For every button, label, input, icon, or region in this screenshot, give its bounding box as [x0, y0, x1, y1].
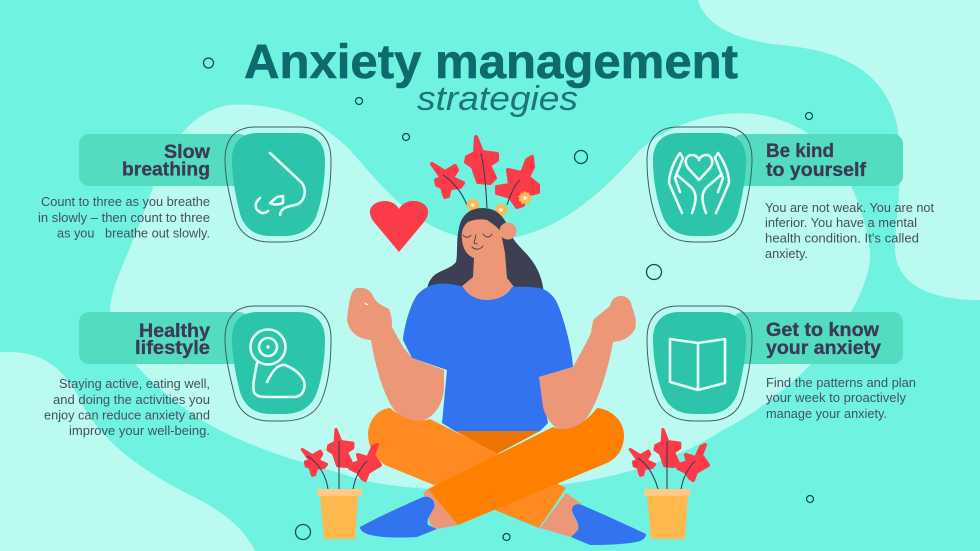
- over leg: [428, 408, 624, 525]
- description: Find the patterns and plan: [766, 376, 916, 390]
- description: enjoy can reduce anxiety and: [44, 408, 210, 422]
- label bar: [79, 134, 249, 186]
- panel: slow breathing: [38, 127, 331, 242]
- icon badge: muscle arm: [225, 306, 331, 421]
- left foot ankle: [423, 489, 458, 529]
- description: [38, 195, 210, 240]
- heading: lifestyle: [135, 338, 210, 359]
- description: You are not weak. You are not: [765, 201, 935, 215]
- heading: [766, 141, 867, 181]
- description: as you breathe out slowly.: [57, 226, 210, 240]
- description: [44, 377, 210, 438]
- description: Count to three as you breathe: [41, 195, 210, 209]
- illustration: meditating woman: [347, 137, 646, 545]
- heading: Be kind: [766, 141, 834, 162]
- right foot: [571, 504, 646, 545]
- description: health condition. It's called: [765, 232, 919, 246]
- icon: heart: [370, 201, 428, 252]
- heading: Get to know: [766, 320, 879, 341]
- crotch shadow: [455, 431, 540, 454]
- description: [766, 376, 916, 421]
- icon badge: nose: [225, 127, 331, 242]
- heading: [122, 142, 210, 180]
- label bar: [733, 312, 903, 364]
- description: in slowly – then count to three: [38, 211, 210, 225]
- description: inferior. You have a mental: [765, 216, 917, 230]
- description: Staying active, eating well,: [59, 377, 210, 391]
- decorative small circles: [204, 58, 814, 540]
- panel: healthy lifestyle: [44, 306, 331, 438]
- plant: left pot: [302, 430, 380, 539]
- icon badge: open book: [647, 306, 752, 421]
- right foot ankle: [540, 493, 582, 537]
- hair: [427, 208, 544, 295]
- panel: be kind to yourself: [647, 127, 935, 261]
- title: strategies: [417, 80, 578, 118]
- heading: [766, 320, 881, 359]
- description: manage your anxiety.: [766, 407, 887, 421]
- flowers on head: [432, 137, 538, 216]
- description: and doing the activities you: [53, 393, 210, 407]
- left foot: [360, 497, 437, 538]
- facial features: [463, 234, 492, 249]
- label bar: [79, 312, 249, 364]
- title: [244, 36, 738, 118]
- plant: right pot: [630, 430, 708, 539]
- description: improve your well-being.: [69, 424, 210, 438]
- face and neck: [461, 219, 514, 302]
- label bar: [733, 134, 903, 186]
- heading: Slow: [164, 142, 210, 163]
- right arm and hand: [539, 296, 636, 430]
- panel: get to know your anxiety: [647, 306, 916, 421]
- ear: [500, 222, 516, 240]
- description: your week to proactively: [766, 391, 907, 405]
- description: [765, 201, 935, 261]
- left arm and hand: [347, 288, 444, 422]
- under leg: [368, 408, 566, 528]
- icon badge: hands holding heart: [647, 127, 752, 242]
- heading: Healthy: [139, 321, 210, 342]
- hand highlight: [364, 302, 618, 312]
- heading: your anxiety: [766, 338, 881, 359]
- heading: breathing: [122, 160, 210, 180]
- title: Anxiety management: [244, 36, 738, 89]
- shirt: [403, 284, 573, 431]
- heading: to yourself: [766, 160, 867, 181]
- heading: [135, 321, 210, 359]
- description: anxiety.: [765, 247, 808, 261]
